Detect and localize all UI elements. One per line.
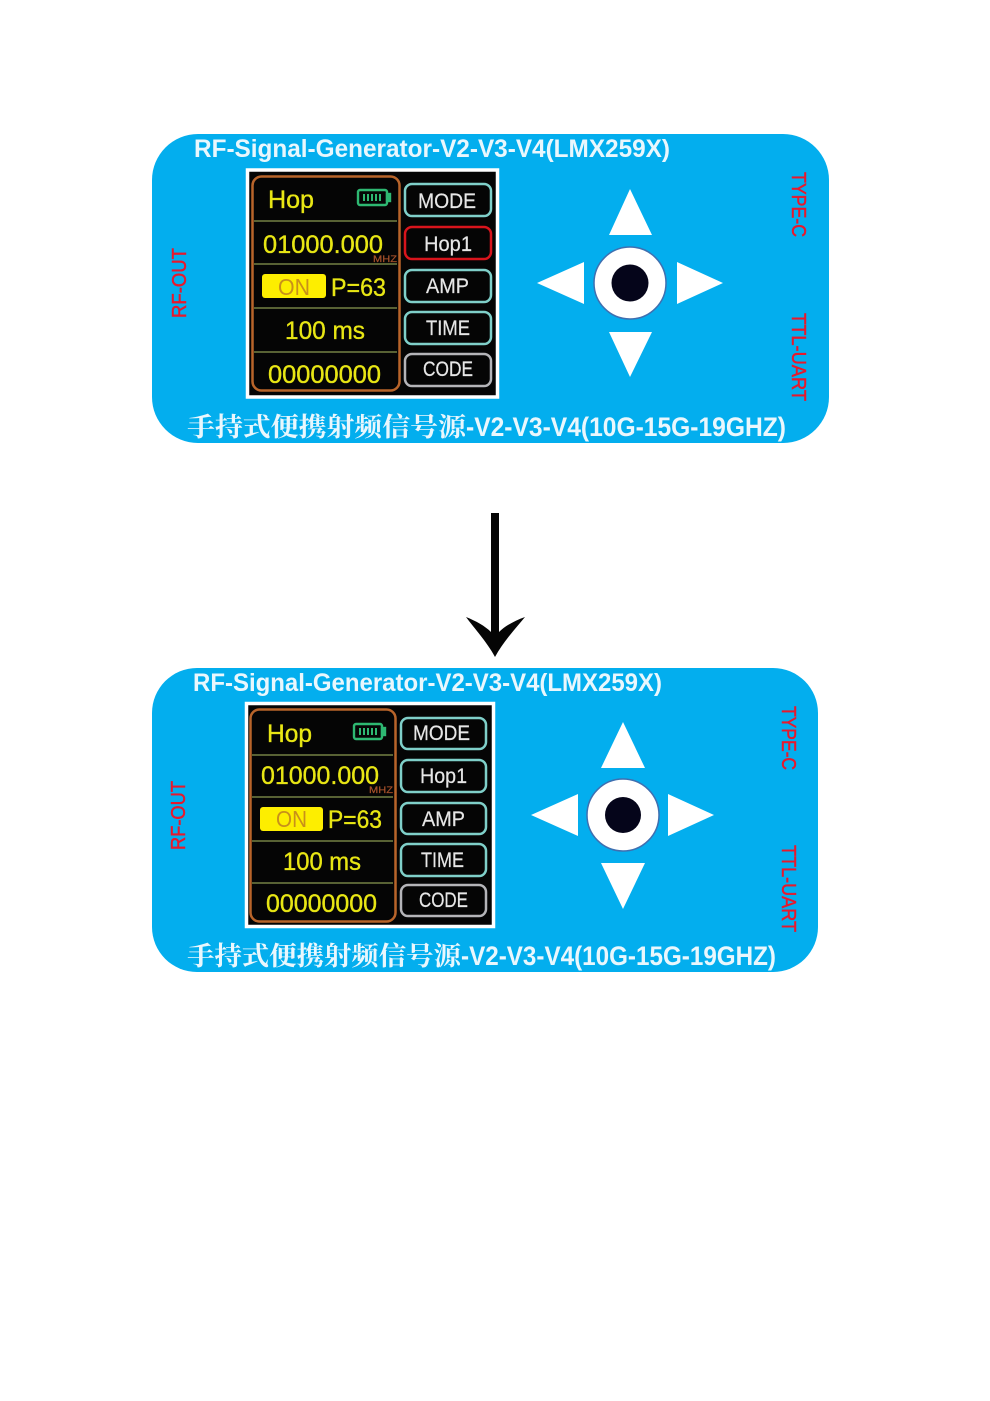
readout outline — [250, 710, 396, 922]
button: AMP: AMP — [422, 808, 465, 831]
button: AMP — [405, 270, 491, 302]
screen — [246, 704, 494, 926]
subtitle: 手持式便携射频信号源 — [187, 941, 463, 971]
ON badge — [262, 274, 326, 298]
button: Hop1 — [405, 227, 491, 259]
subtitle — [187, 412, 786, 442]
screen frame — [248, 170, 498, 397]
label: TTL-UART: TTL-UART — [787, 313, 809, 401]
heading: RF-Signal-Generator-V2-V3-V4(LMX259X) — [194, 135, 670, 163]
frequency readout: 01000.000 — [263, 231, 383, 259]
button: Hop1: Hop1 — [420, 765, 467, 788]
subtitle: -V2-V3-V4(10G-15G-19GHZ) — [466, 412, 786, 442]
frequency unit: MHZ — [373, 254, 398, 264]
ON badge — [260, 807, 323, 831]
button: MODE: MODE — [413, 722, 470, 745]
button: CODE: CODE — [419, 889, 468, 912]
ON text: ON — [276, 806, 307, 832]
icon: directional pad — [537, 189, 723, 377]
button: CODE — [405, 354, 491, 386]
icon: directional pad — [531, 722, 714, 909]
label: RF-OUT: RF-OUT — [169, 248, 191, 318]
subtitle: 手持式便携射频信号源 — [187, 412, 468, 442]
power readout: P=63 — [328, 806, 382, 834]
mode readout: Hop — [268, 186, 314, 214]
button: MODE — [405, 184, 491, 216]
time readout: 100 ms — [283, 848, 361, 876]
screen frame — [246, 704, 494, 926]
icon: battery — [358, 190, 390, 205]
button: MODE: MODE — [418, 190, 476, 213]
code readout: 00000000 — [268, 361, 381, 389]
frequency unit: MHZ — [369, 785, 394, 795]
readout box — [252, 176, 400, 390]
button: AMP — [401, 803, 486, 834]
icon: battery — [354, 724, 385, 739]
button: TIME — [401, 844, 486, 876]
panel: top device V2-V3-V4 — [152, 134, 829, 443]
button: Hop1 — [401, 760, 486, 792]
heading: RF-Signal-Generator-V2-V3-V4(LMX259X) — [193, 669, 662, 697]
button: TIME — [405, 312, 491, 344]
device body — [152, 668, 818, 972]
button: AMP: AMP — [426, 275, 469, 298]
label: RF-OUT: RF-OUT — [168, 781, 190, 850]
screen — [248, 170, 498, 397]
button: CODE: CODE — [423, 358, 473, 381]
mode readout: Hop — [267, 720, 312, 748]
subtitle: -V2-V3-V4(10G-15G-19GHZ) — [461, 941, 776, 971]
readout box — [250, 710, 396, 922]
time readout: 100 ms — [285, 317, 365, 345]
power readout: P=63 — [331, 274, 386, 302]
panel: bottom device V2-V3-V4 — [152, 668, 818, 972]
label: TTL-UART: TTL-UART — [777, 845, 799, 932]
frequency readout: 01000.000 — [261, 762, 379, 790]
button: MODE — [401, 718, 486, 749]
label: TYPE-C: TYPE-C — [787, 172, 809, 237]
device body — [152, 134, 829, 443]
readout outline — [252, 176, 400, 390]
arrow: down — [466, 513, 525, 657]
subtitle — [187, 941, 776, 971]
button: TIME: TIME — [426, 317, 470, 340]
button: Hop1: Hop1 — [424, 233, 472, 256]
ON text: ON — [278, 274, 310, 300]
button: TIME: TIME — [421, 849, 464, 872]
label: TYPE-C: TYPE-C — [777, 706, 799, 770]
button: CODE — [401, 885, 486, 916]
code readout: 00000000 — [266, 890, 377, 918]
